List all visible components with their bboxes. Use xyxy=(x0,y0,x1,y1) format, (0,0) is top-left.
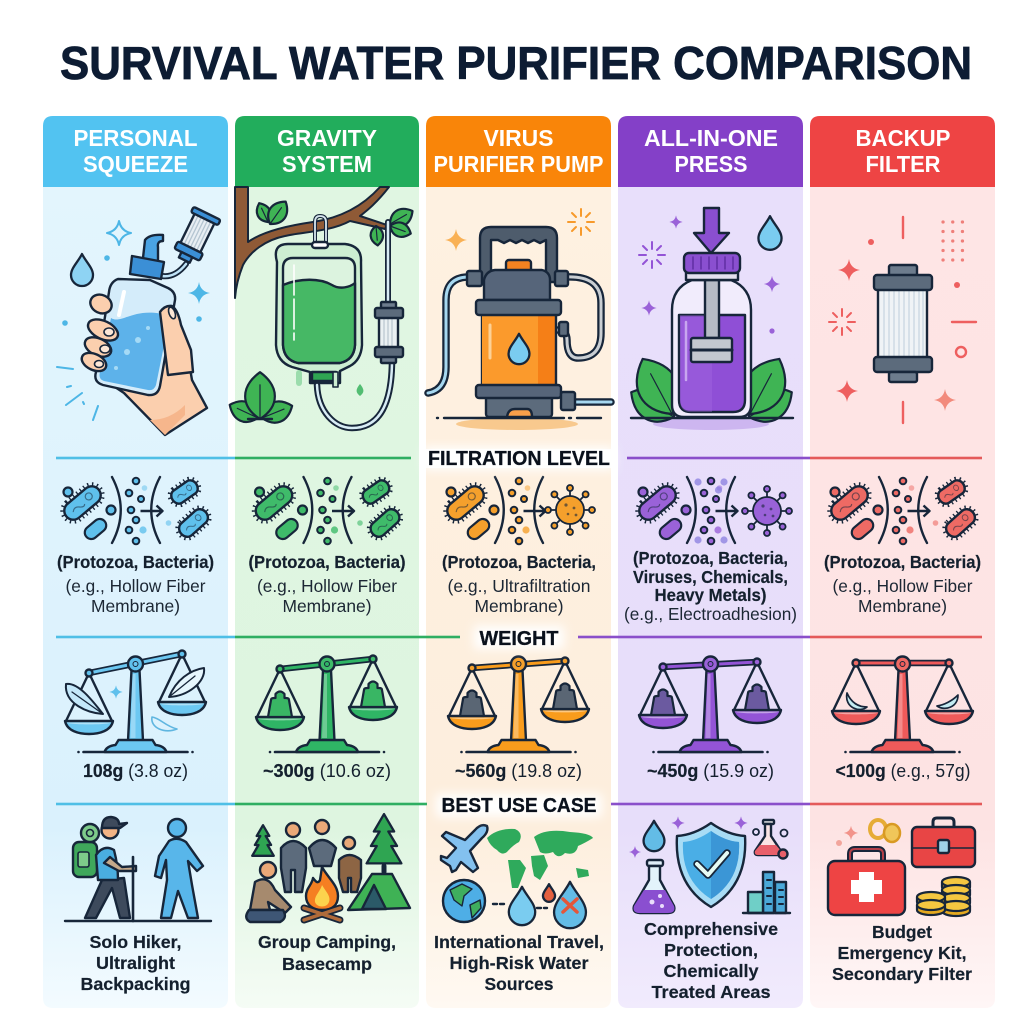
icon: virus xyxy=(742,486,792,536)
use case icon: shield, flasks and city xyxy=(629,816,790,913)
column header: ALL-IN-ONE xyxy=(644,125,778,151)
use case text: Basecamp xyxy=(282,954,372,974)
use case text: High-Risk Water xyxy=(450,953,589,973)
filtration text: Heavy Metals) xyxy=(654,585,766,605)
use case text: Group Camping, xyxy=(258,932,396,952)
weight value: ~450g (15.9 oz) xyxy=(647,761,774,781)
section heading: best use case xyxy=(56,794,982,817)
filtration text: (e.g., Hollow Fiber xyxy=(66,576,206,596)
illustration: hanging gravity bag xyxy=(226,187,417,428)
filtration text: (Protozoa, Bacteria, xyxy=(633,548,788,568)
illustration: replacement filter cartridge xyxy=(829,217,976,423)
weight icon: scale with heavy weights xyxy=(448,656,589,753)
filtration text: (e.g., Hollow Fiber xyxy=(257,576,397,596)
filtration text: Membrane) xyxy=(474,596,564,616)
use case text: Solo Hiker, xyxy=(90,932,182,952)
illustration: hand squeezing bottle xyxy=(57,207,221,435)
panel: backup filter xyxy=(810,116,995,1008)
filtration text: (Protozoa, Bacteria, xyxy=(442,552,596,572)
section heading: filtration level xyxy=(56,447,982,470)
column header: PURIFIER PUMP xyxy=(434,151,604,177)
column header xyxy=(43,116,228,187)
filtration text: (Protozoa, Bacteria) xyxy=(57,552,214,572)
use case text: Treated Areas xyxy=(652,982,771,1002)
weight value: ~300g (10.6 oz) xyxy=(263,761,391,781)
weight value: <100g (e.g., 57g) xyxy=(836,761,970,781)
panel background xyxy=(618,187,803,1008)
column header: SYSTEM xyxy=(282,151,372,177)
weight icon: scale with weights xyxy=(639,656,781,753)
column header: PRESS xyxy=(674,151,748,177)
filtration text xyxy=(624,548,797,624)
weight value: 108g (3.8 oz) xyxy=(83,761,188,781)
filtration icon xyxy=(442,477,546,544)
filtration text xyxy=(248,552,406,616)
filtration text xyxy=(442,552,596,616)
column header xyxy=(426,116,611,187)
section heading: weight: WEIGHT xyxy=(480,628,558,650)
use case text: International Travel, xyxy=(434,932,604,952)
column header: SQUEEZE xyxy=(83,151,188,177)
use case text: Sources xyxy=(484,974,554,994)
filtration icon xyxy=(826,476,980,544)
section heading: weight xyxy=(56,626,982,650)
column header: VIRUS xyxy=(484,125,554,151)
use case text xyxy=(832,922,972,984)
column header: GRAVITY xyxy=(277,125,377,151)
use case text: Backpacking xyxy=(80,974,190,994)
use case icon: emergency kit and coins xyxy=(828,818,975,916)
use case text: Emergency Kit, xyxy=(838,943,966,963)
panel: virus purifier pump xyxy=(426,116,611,1008)
filtration text xyxy=(57,552,214,616)
use case text xyxy=(258,932,396,974)
use case text: Chemically xyxy=(664,961,759,981)
use case text: Ultralight xyxy=(96,953,175,973)
weight icon: balanced scale xyxy=(832,656,973,753)
filtration text: (Protozoa, Bacteria) xyxy=(824,552,981,572)
illustration: press bottle xyxy=(623,208,800,431)
filtration icon xyxy=(634,477,738,544)
column header xyxy=(810,116,995,187)
weight icon: scale with weights xyxy=(256,656,397,753)
panel: gravity system xyxy=(226,116,419,1008)
filtration icon xyxy=(250,476,404,544)
use case icon: group camping xyxy=(246,814,410,922)
panel background xyxy=(43,187,228,1008)
filtration text: Membrane) xyxy=(91,596,180,616)
use case text xyxy=(644,919,778,1002)
use case text: Protection, xyxy=(664,940,758,960)
illustration: virus purifier pump xyxy=(428,209,611,430)
use case text: Secondary Filter xyxy=(832,964,972,984)
filtration text xyxy=(824,552,981,616)
weight icon: scale with feathers xyxy=(65,650,206,753)
use case icon: hikers xyxy=(65,817,211,921)
use case text: Comprehensive xyxy=(644,919,778,939)
panel: personal squeeze xyxy=(43,116,228,1008)
filtration text: Membrane) xyxy=(282,596,372,616)
column header: BACKUP xyxy=(856,125,950,151)
filtration text: (e.g., Electroadhesion) xyxy=(624,604,797,624)
column header xyxy=(235,116,419,187)
filtration text: (e.g., Hollow Fiber xyxy=(832,576,973,596)
filtration text: Membrane) xyxy=(858,596,947,616)
filtration text: Viruses, Chemicals, xyxy=(633,567,788,587)
panel: all-in-one press xyxy=(618,116,803,1008)
column header: PERSONAL xyxy=(74,125,198,151)
weight value: ~560g (19.8 oz) xyxy=(455,761,582,781)
use case icon: travel and water risk xyxy=(441,825,593,928)
section heading: best use case: BEST USE CASE xyxy=(442,795,596,817)
section heading: filtration level: FILTRATION LEVEL xyxy=(428,448,610,470)
filtration text: (e.g., Ultrafiltration xyxy=(448,576,590,596)
panel background xyxy=(426,187,611,1008)
icon: virus xyxy=(545,485,595,535)
column header xyxy=(618,116,803,187)
filtration text: (Protozoa, Bacteria) xyxy=(248,552,406,572)
column header: FILTER xyxy=(866,151,941,177)
panel background xyxy=(810,187,995,1008)
panel background xyxy=(235,187,419,1008)
title: SURVIVAL WATER PURIFIER COMPARISON xyxy=(60,37,972,89)
use case text xyxy=(434,932,604,994)
filtration icon xyxy=(59,476,213,544)
use case text: Budget xyxy=(872,922,932,942)
use case text xyxy=(80,932,190,994)
